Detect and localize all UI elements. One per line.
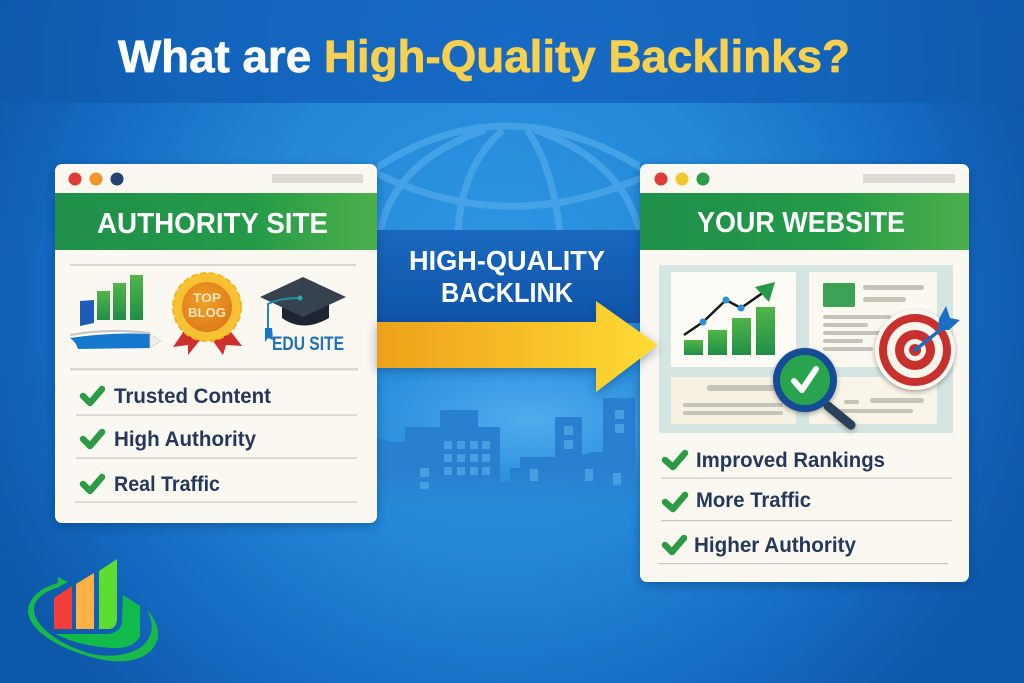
logo bar: green [99, 559, 117, 629]
logo bar: orange [76, 573, 94, 629]
item: higher authority: Higher Authority [694, 534, 856, 557]
address bar [272, 174, 363, 183]
icon: top blog badge: TOP [193, 291, 221, 305]
globe watermark [370, 126, 648, 232]
panel: your website [640, 164, 969, 582]
item: improved rankings: Improved Rankings [696, 449, 885, 472]
list: website benefits [658, 449, 952, 564]
card: lower right [809, 377, 937, 424]
item: real traffic: Real Traffic [114, 473, 220, 496]
banner: high-quality backlink [377, 230, 640, 323]
card: lower left [671, 377, 796, 424]
green heading [640, 193, 969, 250]
icon: target with dart [875, 306, 960, 390]
city skyline watermark [377, 398, 635, 510]
window dots [68, 172, 124, 186]
card: growth chart [671, 272, 796, 367]
card: article [809, 272, 937, 367]
icon: graduation cap [260, 277, 346, 342]
dashboard illustration [659, 265, 960, 433]
item: more traffic: More Traffic [696, 489, 811, 512]
icon: top blog badge: BLOG [188, 305, 226, 320]
title: What are High-Quality Backlinks? [118, 31, 850, 82]
green heading: AUTHORITY SITE [97, 208, 328, 240]
logo swoosh [28, 583, 158, 661]
green heading [55, 193, 377, 250]
banner: high-quality backlink: HIGH-QUALITY [409, 245, 605, 276]
item: trusted content: Trusted Content [114, 385, 271, 408]
arrow: backlink from authority site to your website [377, 301, 658, 392]
icon: bar chart with pencil [70, 275, 161, 349]
icon: top blog badge [173, 273, 242, 355]
icon: magnifying glass with check [773, 348, 851, 425]
panel: authority site [55, 164, 377, 523]
window dots [654, 172, 710, 186]
list: authority benefits [75, 385, 357, 503]
logo arrowhead [58, 577, 68, 587]
item: high authority: High Authority [114, 428, 256, 451]
label: edu site: EDU SITE [272, 334, 344, 355]
logo [28, 559, 158, 661]
green heading: YOUR WEBSITE [697, 207, 905, 239]
logo bar: red [54, 586, 72, 629]
logo base [56, 595, 140, 648]
address bar [863, 174, 955, 183]
banner: high-quality backlink: BACKLINK [441, 277, 573, 308]
